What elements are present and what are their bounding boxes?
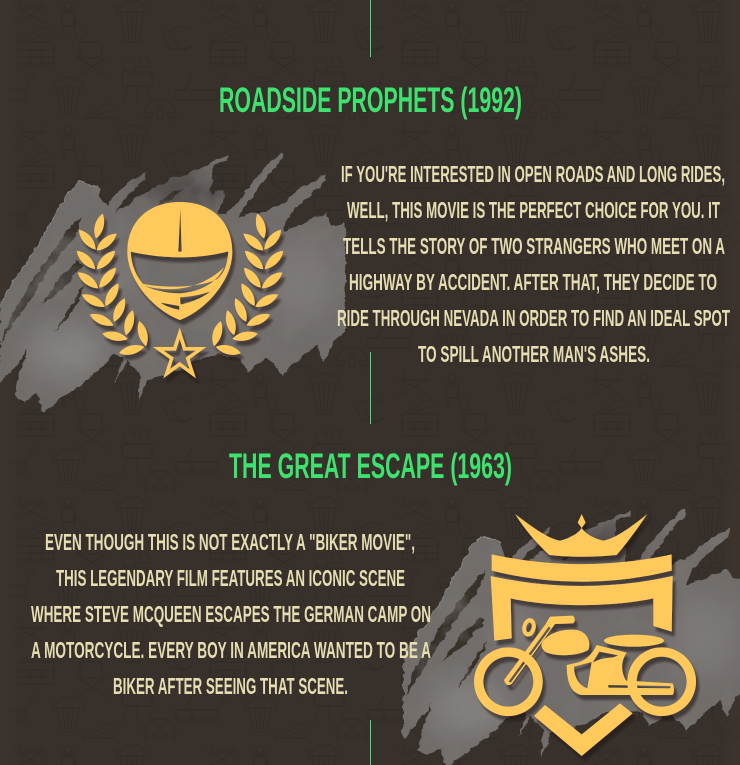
connector line: middle (370, 352, 371, 424)
text block: The Great Escape description: WHERE STEVE MCQUEEN ESCAPES THE GERMAN CAMP ON (31, 601, 431, 627)
text block: Roadside Prophets description (337, 161, 730, 367)
text block: The Great Escape description: BIKER AFTER SEEING THAT SCENE. (113, 673, 348, 699)
icon: motorcycle shield with crown (474, 514, 696, 756)
icon: helmet with laurel and star (74, 202, 286, 378)
heading: Roadside Prophets: ROADSIDE PROPHETS (1992) (219, 81, 522, 120)
connector line: top (370, 0, 371, 57)
text block: The Great Escape description: THIS LEGENDARY FILM FEATURES AN ICONIC SCENE (56, 565, 405, 591)
brush stroke: second movie (403, 508, 740, 765)
connector line: bottom (370, 720, 371, 765)
heading: The Great Escape: THE GREAT ESCAPE (1963) (229, 447, 512, 486)
text block: The Great Escape description: EVEN THOUGH THIS IS NOT EXACTLY A "BIKER MOVIE", (45, 529, 415, 555)
text block: The Great Escape description (31, 529, 431, 699)
text block: The Great Escape description: A MOTORCYCLE. EVERY BOY IN AMERICA WANTED TO BE A (31, 637, 431, 663)
brush stroke: first movie (0, 153, 345, 412)
